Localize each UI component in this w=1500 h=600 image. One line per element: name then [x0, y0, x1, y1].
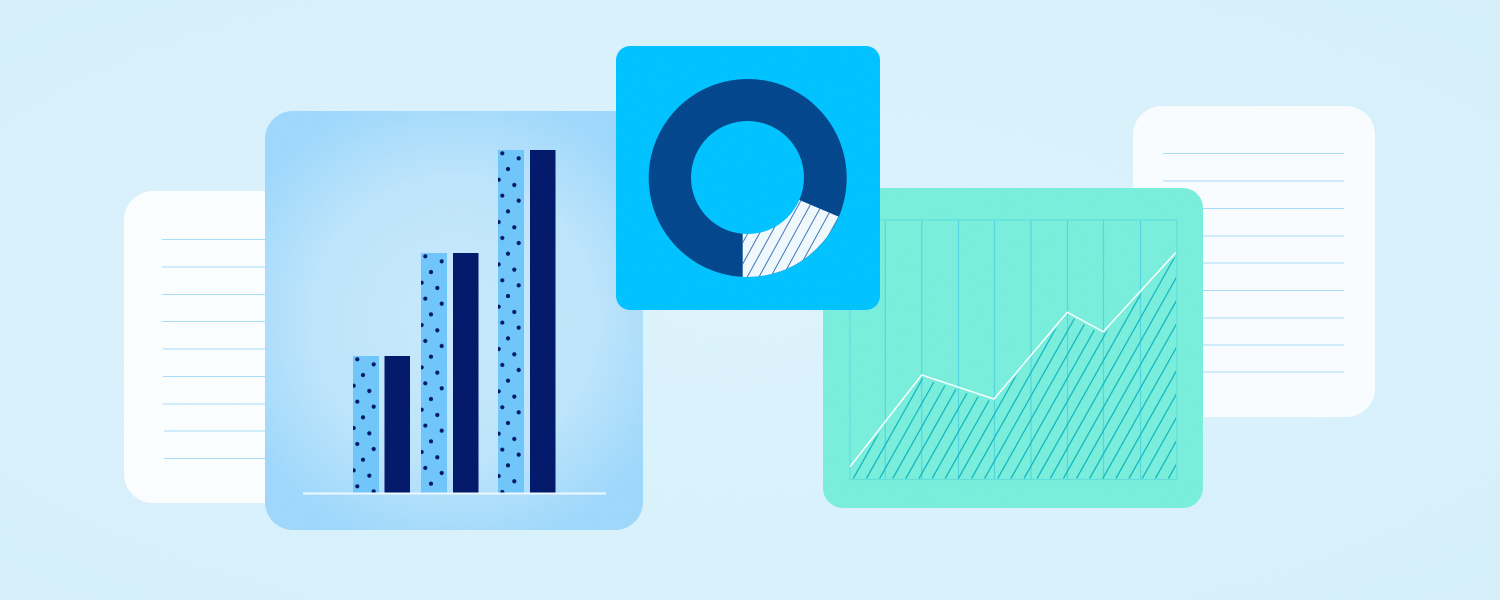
trend line — [850, 252, 1176, 467]
panel: right document — [1133, 106, 1375, 417]
panel: bar chart card — [265, 111, 643, 530]
donut ring — [649, 79, 847, 277]
panel: left document — [124, 191, 324, 503]
donut highlighted segment — [742, 200, 839, 277]
bar group 2 — [421, 253, 478, 492]
panel: donut chart card — [616, 46, 880, 310]
chart grid — [850, 220, 1177, 480]
donut hole — [691, 121, 804, 234]
illustration: analytics charts collage — [124, 46, 1375, 530]
bar group 3 — [498, 150, 556, 492]
hatched area under line — [852, 256, 1176, 479]
axis baseline — [303, 492, 606, 494]
bar group 1 — [353, 356, 410, 492]
panel: line chart card — [823, 188, 1203, 508]
